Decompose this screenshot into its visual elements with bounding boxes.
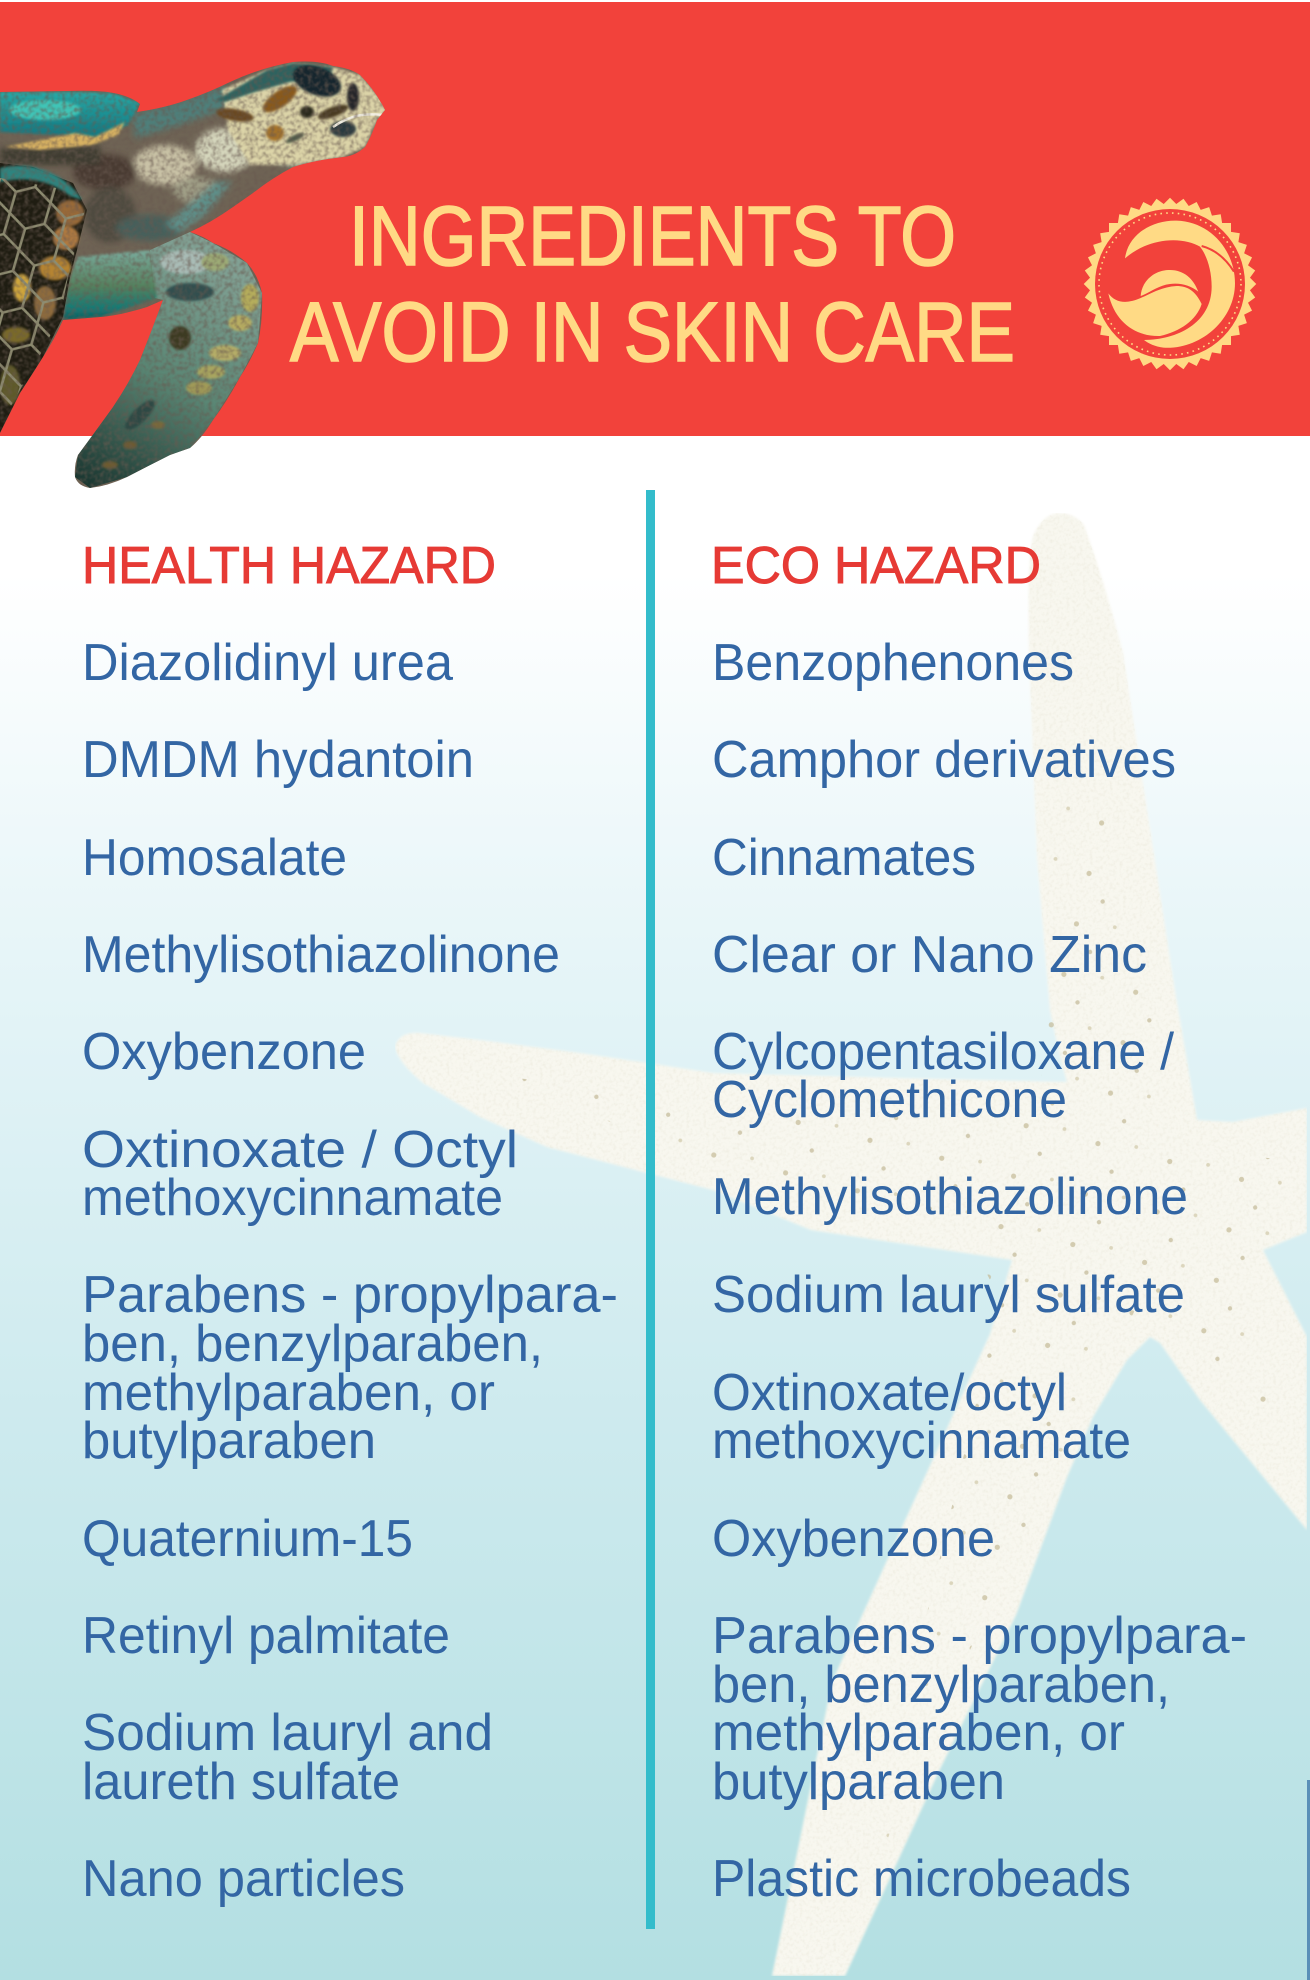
title: AVOID IN SKIN CARE xyxy=(290,285,1015,379)
eco hazard ingredient list: Plastic microbeads xyxy=(712,1850,1131,1908)
shell scute lines xyxy=(0,178,85,425)
health hazard ingredient list: methylparaben, or xyxy=(82,1364,495,1422)
health hazard ingredient list: butylparaben xyxy=(82,1412,376,1470)
title xyxy=(290,189,1015,379)
panel: eco hazard column xyxy=(711,537,1247,1908)
eco hazard ingredient list: methoxycinnamate xyxy=(712,1412,1131,1470)
health hazard ingredient list: Retinyl palmitate xyxy=(82,1607,450,1665)
shell amber patches xyxy=(0,200,84,405)
turtle lower flipper xyxy=(75,232,262,488)
health hazard ingredient list: Homosalate xyxy=(82,829,347,887)
eco hazard ingredient list: Sodium lauryl sulfate xyxy=(712,1266,1185,1324)
eco hazard ingredient list: Methylisothiazolinone xyxy=(712,1168,1188,1226)
flipper markings xyxy=(102,250,259,469)
seal starburst edge xyxy=(1084,198,1256,370)
heading: eco hazard: ECO HAZARD xyxy=(711,537,1041,595)
eco hazard ingredient list: methylparaben, or xyxy=(712,1704,1125,1762)
health hazard ingredient list: Diazolidinyl urea xyxy=(82,634,453,692)
heading: health hazard: HEALTH HAZARD xyxy=(82,537,496,595)
title: INGREDIENTS TO xyxy=(349,189,956,283)
eco hazard ingredient list: ben, benzylparaben, xyxy=(712,1656,1170,1714)
eco hazard ingredient list: butylparaben xyxy=(712,1753,1005,1811)
illustration: starfish xyxy=(395,513,1307,1976)
head markings xyxy=(215,59,359,145)
eco hazard ingredient list: Cinnamates xyxy=(712,829,976,887)
banner: red header xyxy=(0,2,1310,436)
health hazard ingredient list: Quaternium-15 xyxy=(82,1510,413,1568)
turtle shell top xyxy=(0,92,140,140)
turtle head xyxy=(222,63,390,165)
seal red disc xyxy=(1095,209,1245,359)
eco hazard ingredient list xyxy=(712,634,1247,1908)
shell teal rim xyxy=(0,166,82,200)
seal crescent and leaf xyxy=(1108,221,1235,348)
divider: column separator xyxy=(646,490,655,1929)
health hazard ingredient list: Methylisothiazolinone xyxy=(82,926,560,984)
eco hazard ingredient list: Oxybenzone xyxy=(712,1510,995,1568)
health hazard ingredient list xyxy=(82,634,618,1908)
eco hazard ingredient list: Cylcopentasiloxane / xyxy=(712,1023,1175,1081)
icon: sun and leaf logo seal xyxy=(1084,198,1256,370)
shell top highlight xyxy=(9,100,81,120)
health hazard ingredient list: Nano particles xyxy=(82,1850,405,1908)
eco hazard ingredient list: Benzophenones xyxy=(712,634,1074,692)
panel: health hazard column xyxy=(82,537,618,1908)
turtle head top band xyxy=(216,63,333,102)
illustration: sea turtle xyxy=(0,50,400,500)
turtle skin grain xyxy=(0,50,400,500)
health hazard ingredient list: methoxycinnamate xyxy=(82,1169,503,1227)
health hazard ingredient list: laureth sulfate xyxy=(82,1753,400,1811)
health hazard ingredient list: Sodium lauryl and xyxy=(82,1704,493,1762)
eco hazard ingredient list: Cyclomethicone xyxy=(712,1071,1067,1129)
turtle flipper base xyxy=(63,250,157,320)
turtle shell band xyxy=(5,122,125,150)
eco hazard ingredient list: Camphor derivatives xyxy=(712,731,1176,789)
health hazard ingredient list: ben, benzylparaben, xyxy=(82,1315,543,1373)
health hazard ingredient list: Oxybenzone xyxy=(82,1023,366,1081)
turtle soft colour regions xyxy=(0,85,343,243)
turtle beak line xyxy=(333,114,383,127)
turtle shell side xyxy=(0,163,87,433)
turtle base colour xyxy=(0,50,400,500)
eco hazard ingredient list: Clear or Nano Zinc xyxy=(712,926,1147,984)
eco hazard ingredient list: Oxtinoxate/octyl xyxy=(712,1364,1067,1422)
seal dotted ring xyxy=(1099,213,1241,355)
health hazard ingredient list: Parabens - propylpara- xyxy=(82,1266,618,1324)
eco hazard ingredient list: Parabens - propylpara- xyxy=(712,1607,1247,1665)
health hazard ingredient list: Oxtinoxate / Octyl xyxy=(82,1121,518,1179)
health hazard ingredient list: DMDM hydantoin xyxy=(82,731,474,789)
